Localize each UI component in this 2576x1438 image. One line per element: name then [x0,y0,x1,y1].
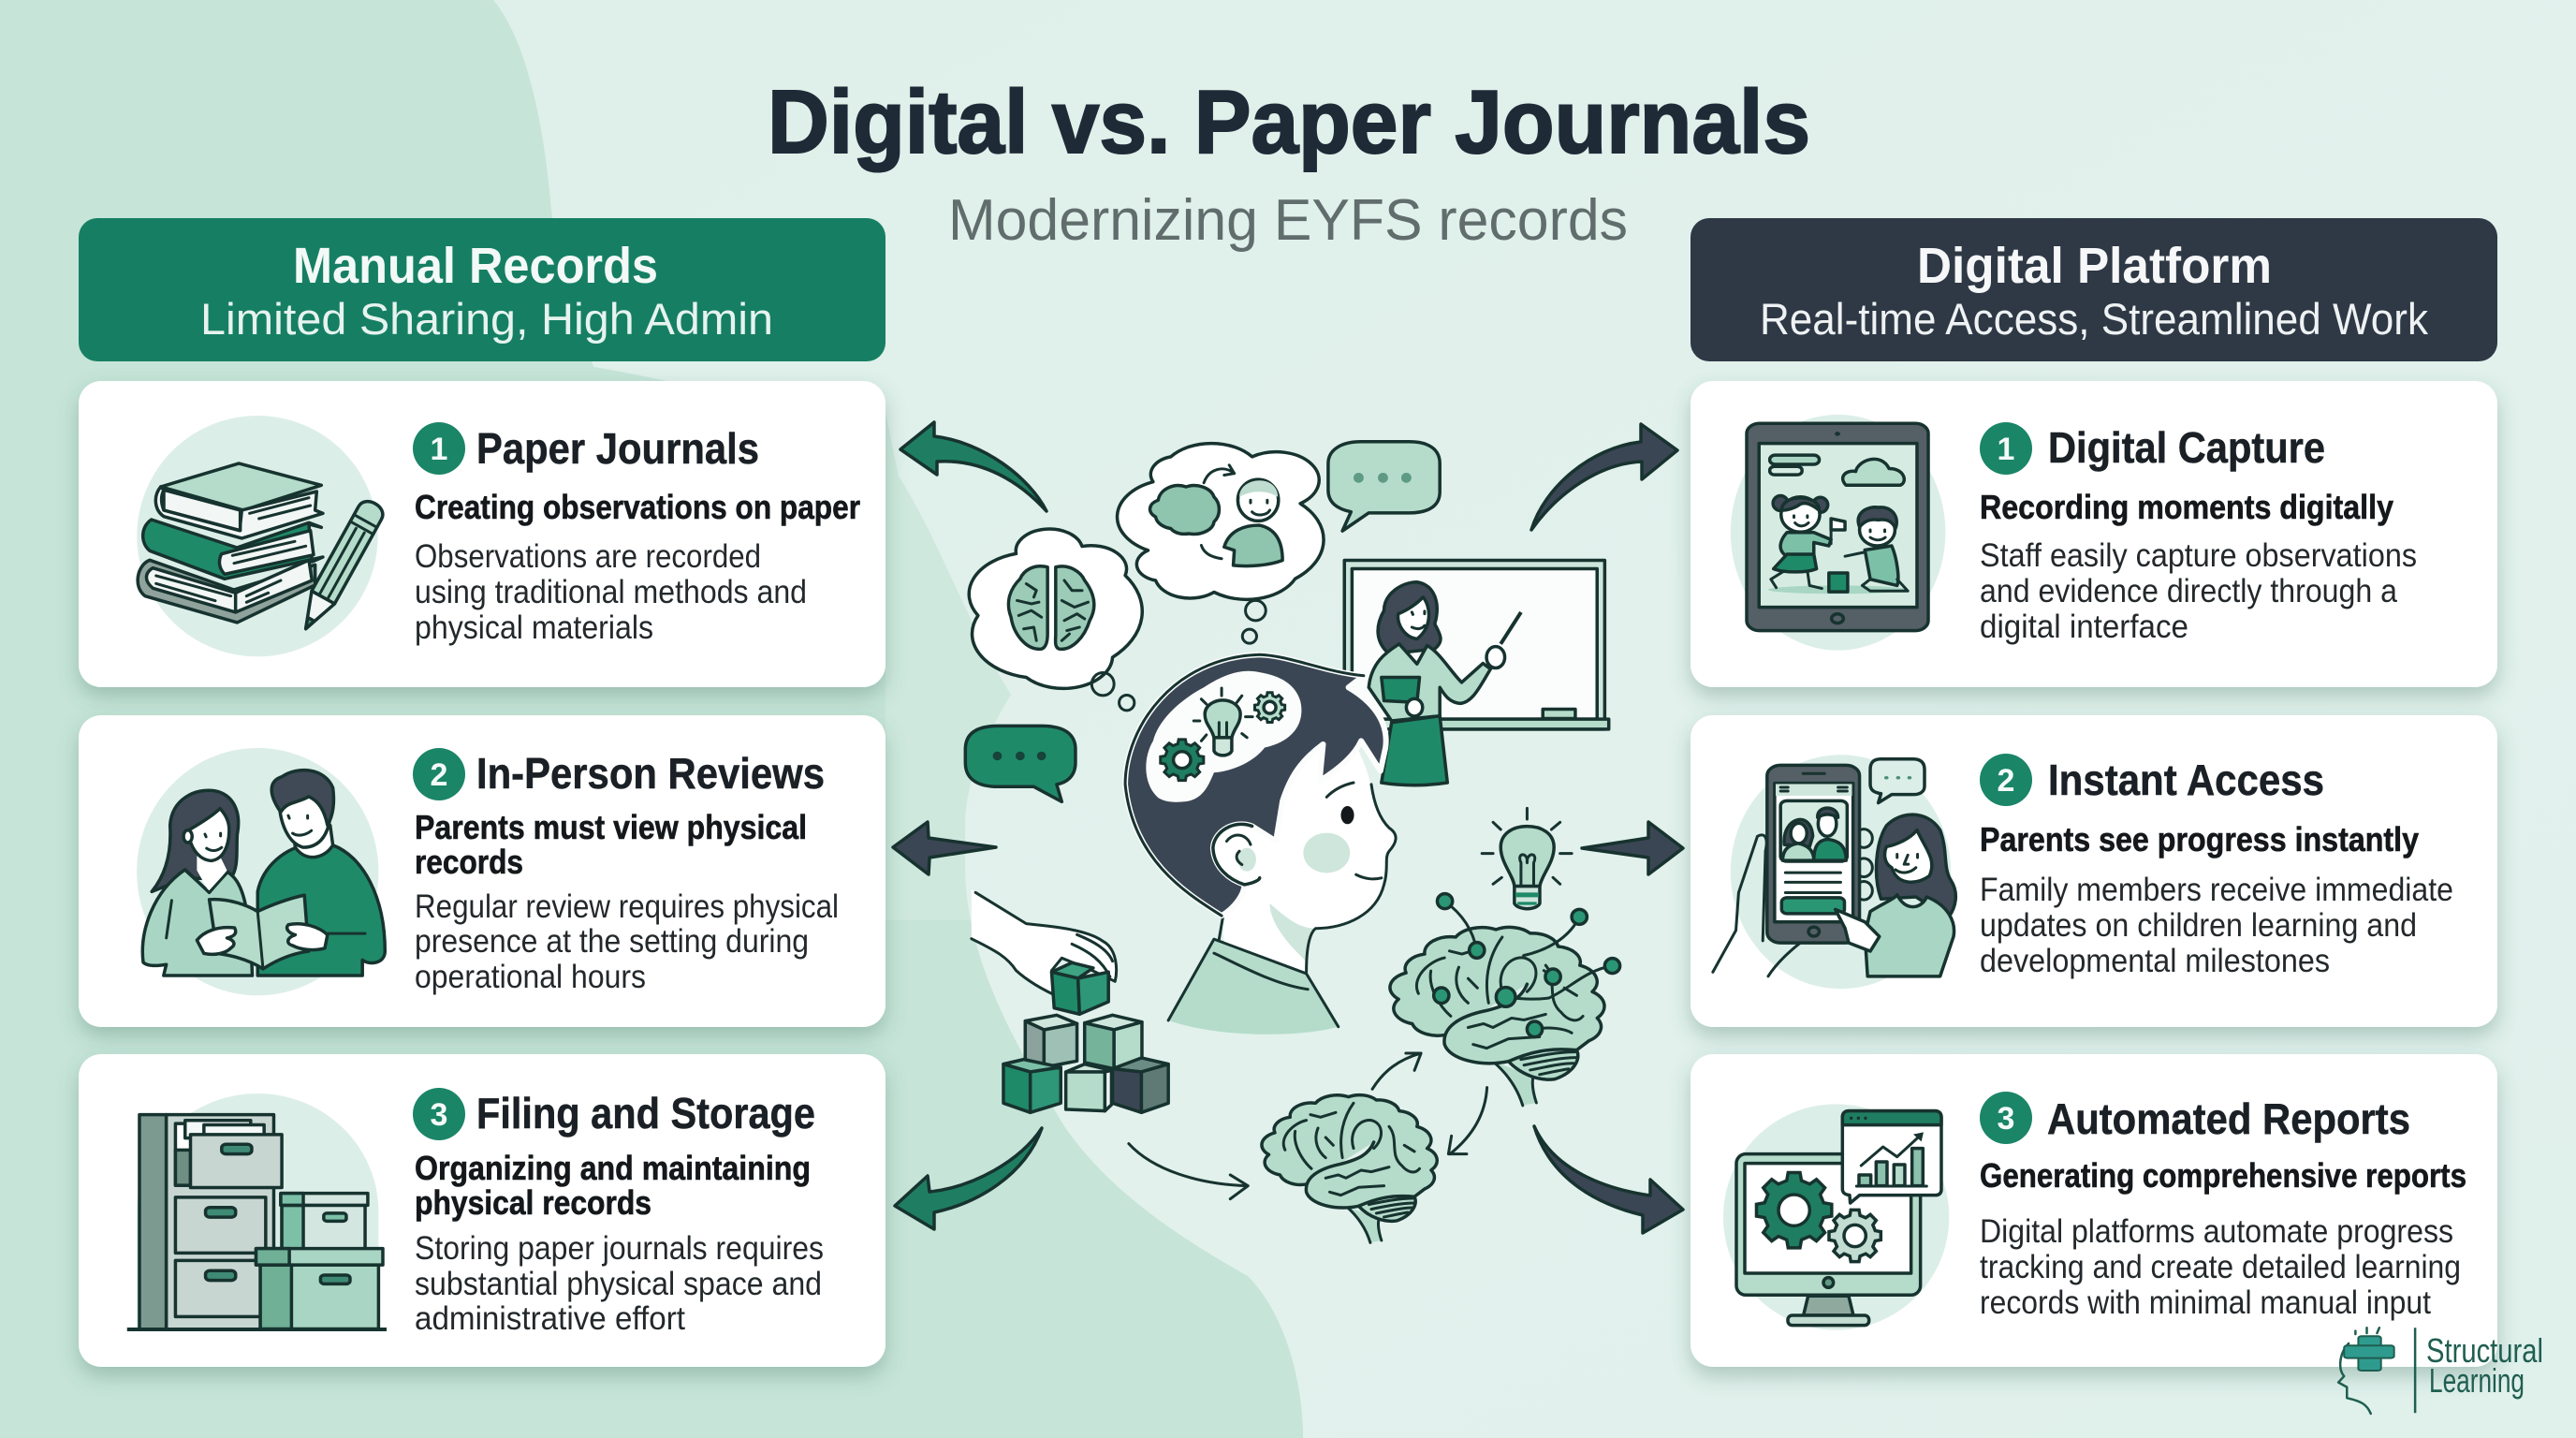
number badge 3: 3 [1998,1101,2014,1137]
number badge 1 [1980,422,2032,475]
body text: administrative effort [415,1300,685,1337]
heading: Digital Capture [2048,423,2325,472]
body text: Staff easily capture observations [1980,537,2417,574]
body text: physical materials [415,609,653,646]
subheading: physical records [415,1183,651,1222]
body text: Observations are recorded [415,538,761,575]
body text: digital interface [1980,609,2188,645]
central illustration lower [972,808,1620,1242]
icon: parent with phone [1713,755,1955,989]
speech bubble light [1328,442,1440,531]
number badge 1: 1 [431,432,447,467]
body text: operational hours [415,959,646,995]
subtitle: Modernizing EYFS records [948,188,1628,253]
body text: using traditional methods and [415,574,807,610]
whiteboard [1344,561,1609,729]
number badge 2: 2 [1998,763,2014,799]
arrow: top right [1531,424,1677,530]
panel header: manual records [79,218,886,361]
thought cloud: brain [969,529,1142,711]
body text: Storing paper journals requires [415,1230,824,1267]
body text: and evidence directly through a [1980,573,2397,609]
brain with network nodes [1390,894,1620,1106]
thin arrows between brains [1129,1053,1487,1199]
heading: Automated Reports [2047,1094,2410,1143]
speech bubble green [965,726,1076,801]
arrow: middle right [1582,822,1683,874]
icon: books and pencil [137,416,387,656]
subheading: Creating observations on paper [415,488,860,526]
central illustration upper [965,442,1609,1034]
panel: filing and storage [79,1054,886,1367]
number badge 3: 3 [431,1097,447,1133]
icon: filing cabinet and boxes [127,1093,387,1329]
hand placing block [972,889,1117,1014]
logo: Structural Learning: Learning [2429,1361,2525,1400]
arrow: bottom left [895,1128,1042,1229]
body text: Family members receive immediate [1980,872,2453,908]
subheading: Parents see progress instantly [1980,820,2419,858]
arrow: top left [900,422,1046,511]
subheading [415,1149,811,1222]
body text: updates on children learning and [1980,907,2417,944]
icon: tablet with children [1731,415,1945,651]
heading: Instant Access [2048,756,2324,804]
subheading: Organizing and maintaining [415,1149,811,1187]
body text: Regular review requires physical [415,888,839,925]
title: Digital vs. Paper Journals [768,72,1810,172]
number badge 2 [1980,754,2032,806]
body text [1980,537,2417,645]
panel: instant access [1690,715,2497,1027]
heading: Filing and Storage [476,1089,815,1137]
body text: substantial physical space and [415,1266,822,1302]
logo: Structural Learning: Structural [2426,1331,2543,1370]
boy with ideas [1125,654,1397,1034]
teacher [1368,582,1521,785]
subheading: Generating comprehensive reports [1980,1156,2466,1195]
heading: Paper Journals [476,424,759,473]
panel: digital capture [1690,381,2497,687]
logo: Structural Learning [2338,1328,2543,1414]
panel: paper journals [79,381,886,687]
body text: presence at the setting during [415,923,809,960]
panel header: manual records: Limited Sharing, High Admin [200,294,773,344]
subheading [415,808,807,881]
number badge 3 [413,1088,465,1140]
icon: two parents reading [137,748,385,995]
number badge 3 [1980,1092,2032,1144]
body text [1980,1213,2461,1321]
body text [415,888,839,995]
body text: tracking and create detailed learning [1980,1249,2461,1285]
body text: Digital platforms automate progress [1980,1213,2453,1250]
subheading: records [415,843,523,881]
subheading: Parents must view physical [415,808,807,846]
panel header: digital platform [1690,218,2497,361]
body text: developmental milestones [1980,943,2330,979]
panel: automated reports [1690,1054,2497,1367]
subheading: Recording moments digitally [1980,488,2393,526]
body text [1980,872,2453,979]
light bulb [1482,808,1572,909]
body text [415,1230,824,1337]
body text [415,538,807,646]
body text: records with minimal manual input [1980,1284,2431,1321]
panel header: digital platform: Real-time Access, Streamlined Work [1760,294,2428,344]
thought cloud: child [1118,444,1324,643]
number badge 1 [413,422,465,475]
panel header: digital platform: Digital Platform [1917,238,2272,294]
number badge 2: 2 [431,757,447,793]
panel header: manual records: Manual Records [293,238,658,294]
arrow: bottom right [1534,1126,1683,1233]
icon: monitor with gears and chart [1723,1104,1949,1330]
brain lower [1262,1095,1437,1242]
arrow: middle left [893,822,996,874]
number badge 2 [413,748,465,800]
panel: in-person reviews [79,715,886,1027]
number badge 1: 1 [1998,432,2014,467]
stacked blocks [1003,1015,1168,1112]
heading: In-Person Reviews [476,749,825,798]
